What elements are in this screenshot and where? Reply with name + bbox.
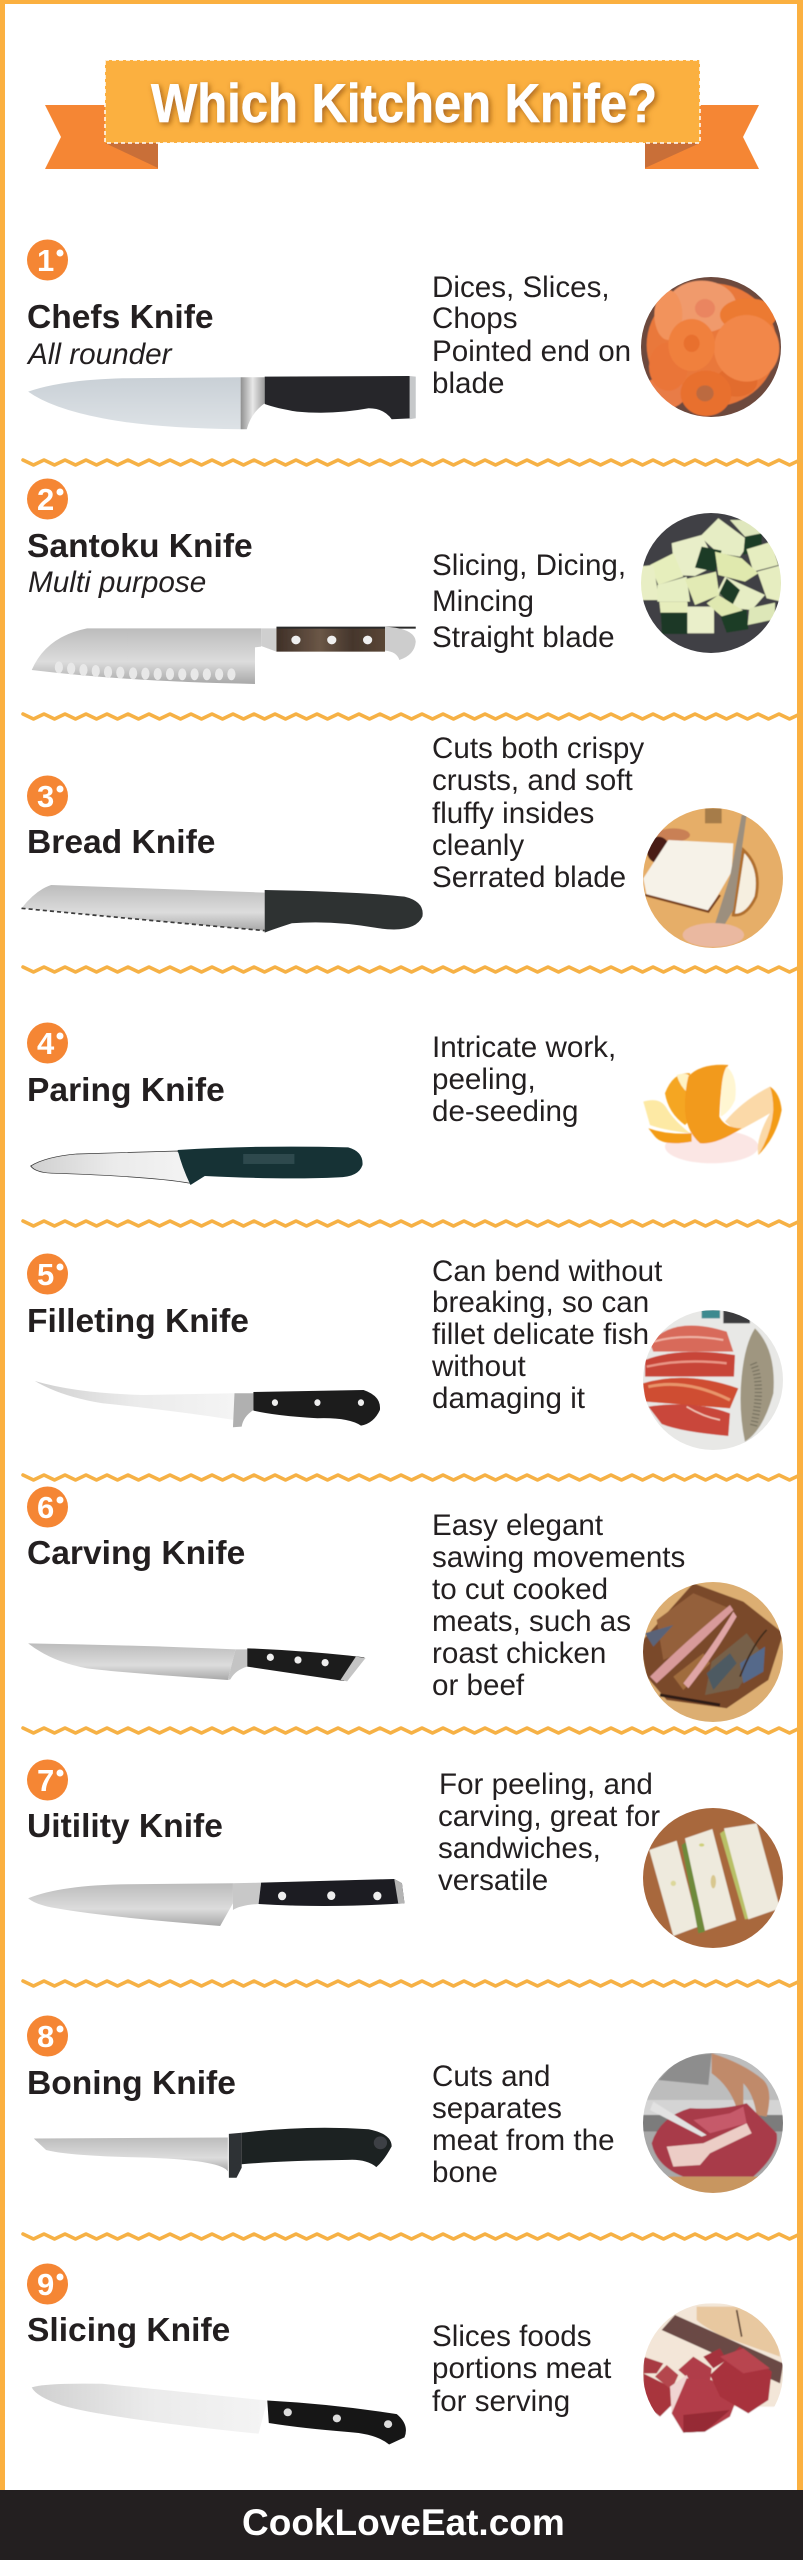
photo: carved roast meat (640, 1580, 787, 1727)
panel: paring knife (27, 1022, 782, 1185)
panel: filleting knife (27, 1254, 787, 1453)
photo: sliced carrots (637, 273, 783, 420)
title: Which Kitchen Knife? (151, 72, 657, 134)
description: slicing knife: for serving (432, 2385, 570, 2418)
number badge 3: 3 (37, 779, 54, 814)
number badge 8 (27, 2016, 68, 2056)
description: bread knife: cleanly (432, 829, 524, 862)
number badge 6: 6 (37, 1490, 54, 1525)
number badge 2 (27, 478, 68, 520)
description: slicing knife: Slices foods (432, 2320, 592, 2353)
photo: meat being boned (640, 2050, 787, 2197)
heading: boning knife: Boning Knife (27, 2065, 236, 2102)
photo: sliced beef (643, 2303, 783, 2434)
icon: utility knife illustration (28, 1879, 404, 1926)
description: boning knife: separates (432, 2092, 562, 2125)
panel: carving knife (27, 1486, 787, 1727)
description: santoku knife: Slicing, Dicing, (432, 549, 626, 582)
number badge 5: 5 (37, 1257, 54, 1292)
number badge 9 (27, 2264, 68, 2304)
heading: slicing knife: Slicing Knife (27, 2312, 230, 2349)
description: carving knife: roast chicken (432, 1637, 606, 1670)
description: chefs knife: blade (432, 367, 504, 400)
banner left ribbon tail (45, 105, 158, 169)
footer bar (0, 2490, 803, 2560)
subheading: multi purpose: Multi purpose (28, 566, 206, 599)
icon: chefs knife illustration (28, 376, 416, 429)
divider 7 (23, 1981, 803, 1986)
number badge 1: 1 (37, 243, 54, 278)
description: bread knife: Serrated blade (432, 861, 626, 894)
number badge 2: 2 (37, 482, 54, 517)
description: carving knife: or beef (432, 1669, 525, 1702)
description: chefs knife: Pointed end on (432, 335, 631, 368)
description: bread knife: crusts, and soft (432, 764, 633, 797)
title banner (45, 60, 759, 169)
description: filleting knife: damaging it (432, 1382, 585, 1415)
heading: santoku knife: Santoku Knife (27, 528, 253, 565)
number badge 9: 9 (37, 2267, 54, 2302)
heading: chefs knife: Chefs Knife (27, 299, 214, 336)
panel: bread knife (22, 732, 787, 952)
divider 6 (23, 1728, 803, 1733)
divider 3 (23, 967, 803, 972)
description: filleting knife: Can bend without (432, 1255, 662, 1288)
description: paring knife: peeling, (432, 1063, 536, 1096)
photo: sandwiches (640, 1805, 787, 1952)
divider 2 (23, 714, 803, 719)
number badge 6 (27, 1486, 68, 1528)
banner right ribbon tail (645, 105, 759, 169)
description: chefs knife: Chops (432, 302, 518, 335)
icon: boning knife illustration (34, 2128, 392, 2178)
description: utility knife: carving, great for (438, 1800, 660, 1833)
panel: boning knife (27, 2016, 787, 2197)
number badge 4: 4 (37, 1026, 55, 1061)
description: filleting knife: without (431, 1350, 526, 1383)
icon: santoku knife illustration (32, 627, 416, 684)
photo: fish fillets (640, 1307, 787, 1453)
divider 1 (23, 460, 803, 465)
footer text: website: CookLoveEat.com (242, 2502, 565, 2543)
description: boning knife: Cuts and (432, 2060, 550, 2093)
icon: filleting knife illustration (35, 1381, 380, 1427)
number badge 3 (27, 776, 68, 816)
description: boning knife: meat from the (432, 2124, 615, 2157)
banner panel (105, 60, 700, 143)
description: carving knife: meats, such as (432, 1605, 631, 1638)
description: paring knife: de-seeding (432, 1095, 578, 1128)
divider 5 (23, 1475, 803, 1480)
icon: slicing knife illustration (32, 2384, 406, 2444)
description: utility knife: versatile (438, 1864, 548, 1897)
description: utility knife: sandwiches, (438, 1832, 601, 1865)
panel: slicing knife (27, 2264, 787, 2450)
panel: chefs knife (26, 240, 783, 429)
photo: orange peel (643, 1065, 782, 1163)
description: filleting knife: breaking, so can (432, 1286, 649, 1319)
description: paring knife: Intricate work, (432, 1031, 616, 1064)
heading: utility knife: Uitility Knife (27, 1808, 223, 1845)
description: chefs knife: Dices, Slices, (432, 271, 610, 304)
divider 8 (23, 2234, 803, 2239)
heading: filleting knife: Filleting Knife (27, 1303, 249, 1340)
description: santoku knife: Mincing (432, 585, 534, 618)
number badge 1 (27, 240, 68, 280)
description: santoku knife: Straight blade (432, 621, 615, 654)
panel: santoku knife (27, 478, 783, 684)
heading: carving knife: Carving Knife (27, 1535, 245, 1572)
photo: diced courgette (637, 510, 783, 657)
description: carving knife: Easy elegant (432, 1509, 603, 1542)
description: carving knife: sawing movements (432, 1541, 685, 1574)
icon: carving knife illustration (28, 1643, 366, 1681)
subheading: all rounder: All rounder (26, 338, 173, 371)
heading: paring knife: Paring Knife (27, 1072, 225, 1109)
heading: bread knife: Bread Knife (27, 824, 215, 861)
number badge 4 (27, 1022, 68, 1064)
description: carving knife: to cut cooked (432, 1573, 608, 1606)
icon: bread knife illustration (22, 885, 423, 933)
description: utility knife: For peeling, and (439, 1768, 653, 1801)
number badge 7 (27, 1760, 68, 1800)
icon: paring knife illustration (31, 1147, 363, 1185)
panel: utility knife (27, 1760, 787, 1952)
photo: bread being sliced (640, 805, 787, 952)
description: filleting knife: fillet delicate fish (432, 1318, 649, 1351)
description: bread knife: fluffy insides (432, 797, 594, 830)
number badge 5 (27, 1254, 68, 1294)
number badge 7: 7 (37, 1763, 54, 1798)
description: boning knife: bone (432, 2156, 498, 2189)
description: slicing knife: portions meat (432, 2352, 611, 2385)
divider 4 (23, 1221, 803, 1226)
description: bread knife: Cuts both crispy (432, 732, 644, 765)
number badge 8: 8 (37, 2019, 54, 2054)
